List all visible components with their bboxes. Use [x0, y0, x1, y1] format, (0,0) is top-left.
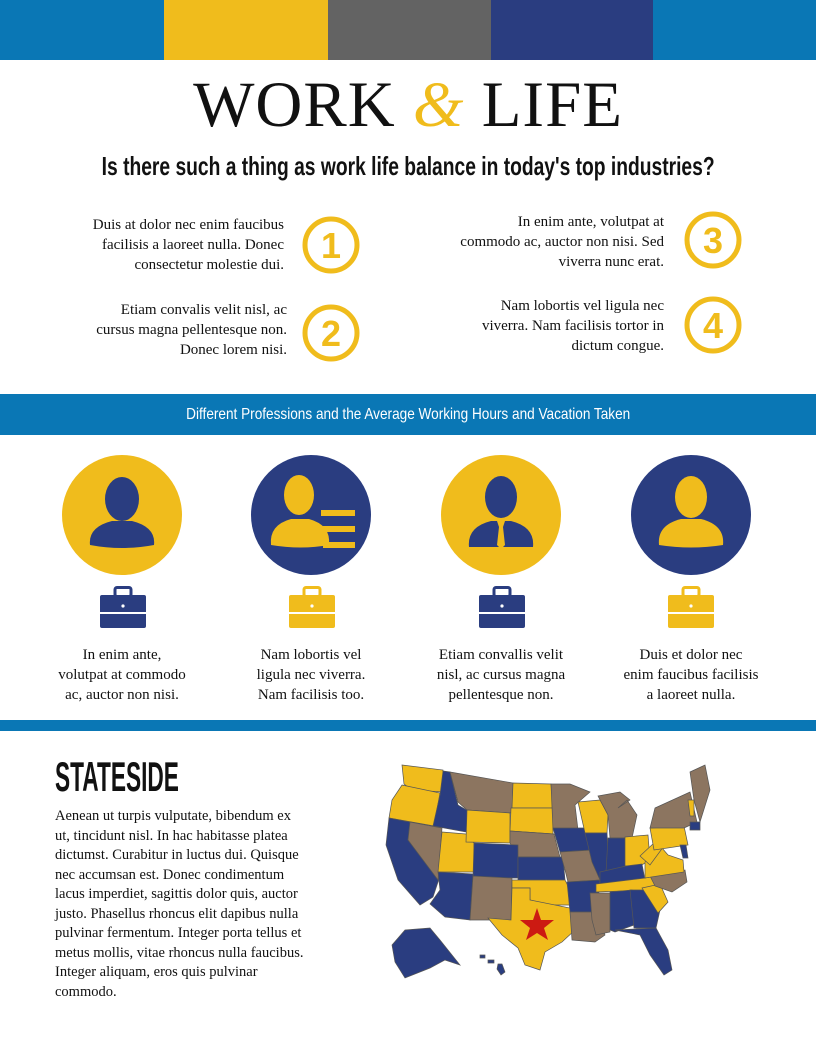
stateside paragraph: nec accumsan est. Donec condimentum [55, 866, 284, 882]
icon: number 2 [302, 304, 360, 362]
stateside paragraph: Integer aliquam, eros quis pulvinar [55, 964, 258, 980]
caption 4: Duis et dolor nec [640, 647, 742, 663]
icon: briefcase 4 [668, 586, 714, 628]
caption 3 [437, 647, 565, 703]
text 4: viverra. Nam facilisis tortor in [482, 318, 664, 334]
text 2: cursus magna pellentesque non. [96, 322, 287, 338]
caption 2: Nam lobortis vel [261, 647, 361, 663]
heading: stateside: STATESIDE [55, 753, 179, 800]
section band heading [0, 394, 816, 435]
icon: profession 3 [441, 455, 561, 575]
icon: profession 1 [62, 455, 182, 575]
icon: number 1: 1 [321, 225, 341, 266]
subtitle: Is there such a thing as work life balance in today's top industries? [102, 151, 714, 181]
caption 1 [58, 647, 186, 703]
text 1: consectetur molestie dui. [134, 257, 284, 273]
icon: briefcase 3 [479, 586, 525, 628]
caption 3: Etiam convallis velit [439, 647, 563, 663]
caption 4: a laoreet nulla. [647, 687, 735, 703]
icon: number 3: 3 [703, 220, 723, 261]
icon: number 2: 2 [321, 313, 341, 354]
stateside paragraph: justo. Phasellus rhoncus elit dapibus nulla [55, 906, 298, 922]
caption 4: enim faucibus facilisis [624, 667, 758, 683]
caption 3: nisl, ac cursus magna [437, 667, 565, 683]
caption 2 [256, 647, 365, 703]
section band heading: Different Professions and the Average Working Hours and Vacation Taken [186, 406, 630, 423]
text 3: viverra nunc erat. [559, 254, 664, 270]
text 3: In enim ante, volutpat at [518, 214, 664, 230]
caption 1: ac, auctor non nisi. [65, 687, 179, 703]
stateside paragraph: commodo. [55, 984, 117, 1000]
text 1: Duis at dolor nec enim faucibus [93, 217, 284, 233]
text 4: Nam lobortis vel ligula nec [501, 298, 664, 314]
text 2 [96, 302, 287, 358]
icon: briefcase 1 [100, 586, 146, 628]
caption 2: Nam facilisis too. [258, 687, 364, 703]
text 2: Etiam convalis velit nisl, ac [121, 302, 287, 318]
stateside paragraph: ut, tincidunt nisl. In hac habitasse platea [55, 828, 288, 844]
icon: star on Texas [520, 908, 554, 940]
title: WORK & LIFE [193, 69, 623, 141]
stateside paragraph: Aenean ut turpis vulputate, bibendum ex [55, 808, 291, 824]
stateside paragraph [54, 808, 303, 1000]
stateside paragraph: pulvinar fermentum. Integer porta tellus et [55, 925, 301, 941]
text 3 [460, 214, 664, 270]
stateside paragraph: dictumst. Curabitur in luctus dui. Quisque [55, 847, 299, 863]
divider band [0, 720, 816, 731]
text 1 [93, 217, 284, 273]
caption 4 [624, 647, 758, 703]
stateside paragraph: lacus imperdiet, sagittis dolor quis, auctor [55, 886, 298, 902]
text 3: commodo ac, auctor non nisi. Sed [460, 234, 664, 250]
top color bars [0, 0, 816, 60]
icon: briefcase 2 [289, 586, 335, 628]
text 4: dictum congue. [572, 338, 664, 354]
caption 3: pellentesque non. [448, 687, 553, 703]
text 4 [482, 298, 664, 354]
text 1: facilisis a laoreet nulla. Donec [102, 237, 284, 253]
icon: number 4 [684, 296, 742, 354]
icon: profession 4 [631, 455, 751, 575]
icon: number 4: 4 [703, 305, 723, 346]
text 2: Donec lorem nisi. [180, 342, 287, 358]
icon: number 1 [302, 216, 360, 274]
stateside paragraph: metus mollis, vitae rhoncus nulla faucibus. [55, 944, 303, 960]
caption 1: volutpat at commodo [58, 667, 186, 683]
caption 2: ligula nec viverra. [257, 667, 365, 683]
icon: profession 2 [251, 455, 371, 575]
icon: number 3 [684, 212, 742, 268]
caption 1: In enim ante, [83, 647, 161, 663]
